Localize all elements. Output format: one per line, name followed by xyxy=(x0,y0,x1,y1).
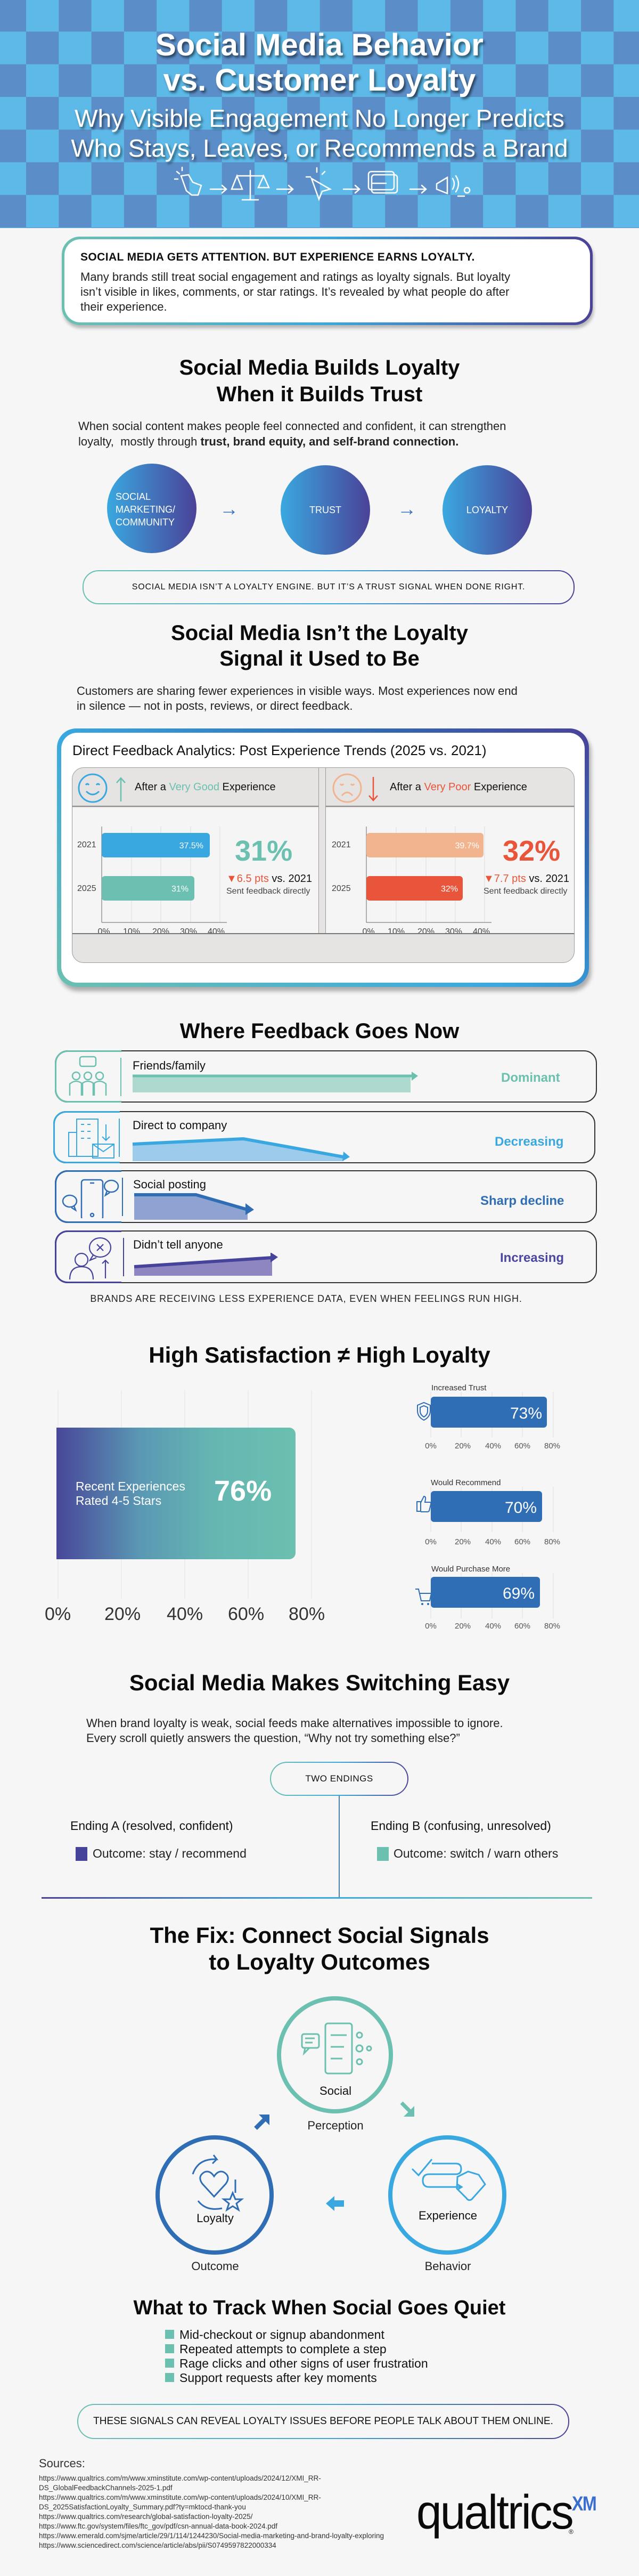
axis labels: 0% xyxy=(45,1604,71,1624)
list: signals: Mid-checkout or signup abandonment xyxy=(179,2328,384,2342)
row: direct to company: Decreasing xyxy=(495,1135,563,1149)
ending A: Ending A (resolved, confident) xyxy=(70,1819,233,1833)
circle: loyalty xyxy=(443,465,532,555)
chart: very poor: ▼7.7 pts vs. 2021 xyxy=(484,873,569,885)
heading: builds loyalty xyxy=(179,356,460,406)
arrow: to loyalty xyxy=(326,2196,344,2211)
metric: increased trust: 40% xyxy=(485,1441,501,1451)
trend: sharp decline xyxy=(134,1193,254,1220)
intro heading: SOCIAL MEDIA GETS ATTENTION. BUT EXPERIENCE EARNS LOYALTY. xyxy=(80,251,475,263)
metric: would recommend: 70% xyxy=(505,1499,537,1517)
chart: very good: Sent feedback directly xyxy=(226,887,310,896)
sources: https://www.sciencedirect.com/science/article/abs/pii/S0749597822000334 xyxy=(39,2541,276,2549)
heading: the fix: The Fix: Connect Social Signals xyxy=(150,1923,489,1948)
pill: two endings xyxy=(270,1762,408,1796)
sources: https://www.qualtrics.com/research/global-satisfaction-loyalty-2025/ xyxy=(39,2513,252,2521)
arrow: to experience xyxy=(400,2102,414,2117)
chart: very poor: 2021 xyxy=(332,840,351,849)
node: loyalty: Loyalty xyxy=(196,2212,234,2225)
stat 31%: 31% xyxy=(235,835,292,867)
title: Social Media Behavior xyxy=(155,28,484,62)
callout: signals reveal xyxy=(77,2404,569,2439)
logo: qualtrics XM: XM xyxy=(572,2493,596,2515)
circle: social marketing: SOCIAL xyxy=(116,491,151,502)
heading: not the loyalty signal xyxy=(171,621,468,670)
list: signals: Support requests after key moments xyxy=(179,2371,377,2385)
bar 76%: Rated 4-5 Stars xyxy=(76,1494,161,1508)
heading: high satisfaction: High Satisfaction ≠ High Loyalty xyxy=(149,1342,490,1367)
circle: loyalty: LOYALTY xyxy=(466,505,508,515)
list: signals: Repeated attempts to complete a step xyxy=(179,2342,387,2356)
chart: very poor: 39.7% xyxy=(455,841,479,850)
metric: increased trust: 73% xyxy=(510,1405,542,1422)
subtitle: Why Visible Engagement No Longer Predicts xyxy=(75,104,564,132)
title xyxy=(155,28,486,101)
row: didn't tell anyone: Didn’t tell anyone xyxy=(133,1238,223,1251)
icon: down arrow xyxy=(368,777,378,801)
list: signals: Rage clicks and other signs of user frustration xyxy=(179,2356,428,2370)
ending A xyxy=(70,1819,247,1861)
chart: very poor xyxy=(326,808,575,933)
metric: would purchase more: Would Purchase More xyxy=(431,1565,510,1574)
metric: increased trust: 0% xyxy=(425,1441,437,1451)
icon: sad face xyxy=(332,774,362,803)
sources: https://www.qualtrics.com/m/www.xminstitute.com/wp-content/uploads/2024/12/XMI_RR-DS_GlobalFeedbackChannels-2025-1.pdf xyxy=(39,2474,321,2492)
trend: dominant xyxy=(133,1072,418,1092)
chart: very good: 2021 xyxy=(77,840,96,849)
header very good xyxy=(72,768,318,807)
sources xyxy=(39,2457,401,2563)
chart: very good: 2025 xyxy=(77,884,96,893)
heading: builds loyalty: Social Media Builds Loyalty xyxy=(179,356,460,379)
icon: group xyxy=(69,1056,106,1096)
node: experience: Experience xyxy=(419,2209,477,2222)
row: social posting xyxy=(55,1170,597,1223)
node: experience xyxy=(388,2132,507,2275)
node: social: Perception xyxy=(307,2119,364,2132)
chart: very poor: 2025 xyxy=(332,884,351,893)
circle: trust xyxy=(281,465,370,555)
circle: trust: TRUST xyxy=(309,505,341,515)
chart: very good: 31% xyxy=(171,885,189,894)
intro box xyxy=(62,237,593,325)
cycle diagram xyxy=(155,1996,506,2273)
arrow: → xyxy=(397,498,416,520)
row: friends/family xyxy=(55,1050,597,1103)
chart: 76% satisfaction xyxy=(45,1390,325,1624)
logo: qualtrics XM: qualtrics xyxy=(416,2486,572,2539)
logo: qualtrics XM: ® xyxy=(569,2528,574,2536)
flow: social to trust to loyalty xyxy=(107,464,532,555)
paragraph: silence: in silence — not in posts, reviews, or direct feedback. xyxy=(77,699,353,712)
icon row: journey xyxy=(174,166,471,201)
metric: increased trust: 80% xyxy=(544,1441,560,1451)
paragraph: switching xyxy=(86,1716,503,1745)
paragraph: trust: When social content makes people feel connected and confident, it can strengthen xyxy=(78,419,506,433)
metric: would purchase more: 80% xyxy=(544,1622,560,1631)
metric: would purchase more: 0% xyxy=(425,1622,437,1631)
paragraph: trust xyxy=(78,419,506,448)
axis labels: 60% xyxy=(228,1604,264,1624)
metric: would recommend: Would Recommend xyxy=(431,1478,501,1487)
header very poor: After a Very Poor Experience xyxy=(390,781,527,793)
axis labels: 40% xyxy=(167,1604,203,1624)
trend: decreasing xyxy=(132,1137,350,1161)
subtitle xyxy=(71,104,570,165)
metric: would recommend xyxy=(416,1478,560,1545)
ending B: Outcome: switch / warn others xyxy=(394,1846,558,1860)
title: vs. Customer Loyalty xyxy=(163,63,476,98)
heading: not the loyalty signal: Signal it Used to Be xyxy=(219,647,420,670)
ending B xyxy=(371,1819,558,1861)
diagram: two endings xyxy=(42,1762,592,1899)
circle: social marketing: COMMUNITY xyxy=(116,517,175,528)
node: social xyxy=(277,1996,393,2132)
arrow: → xyxy=(219,498,239,520)
subtitle: Who Stays, Leaves, or Recommends a Brand xyxy=(71,134,568,162)
metric: would purchase more: 69% xyxy=(503,1585,535,1602)
row: friends/family: Friends/family xyxy=(133,1059,206,1072)
chart: loyalty metrics xyxy=(415,1383,560,1631)
intro body: Many brands still treat social engagement and ratings as loyalty signals. But loyalty xyxy=(80,270,510,283)
sub-panel: very good xyxy=(72,774,318,933)
chart: very poor: Sent feedback directly xyxy=(484,887,567,896)
divider xyxy=(318,768,326,933)
heading: not the loyalty signal: Social Media Isn’t the Loyalty xyxy=(171,621,468,645)
metric: increased trust xyxy=(417,1383,560,1451)
arrow: to social xyxy=(254,2115,269,2130)
node: loyalty: Outcome xyxy=(191,2259,239,2273)
callout: trust signal xyxy=(83,570,575,604)
panel title: Direct Feedback Analytics: Post Experience Trends (2025 vs. 2021) xyxy=(72,742,487,758)
row: social posting: Sharp decline xyxy=(480,1194,564,1208)
list: signals xyxy=(165,2328,485,2387)
paragraph: switching: Every scroll quietly answers the question, “Why not try something else?” xyxy=(86,1731,460,1745)
header banner xyxy=(0,0,639,228)
heading: what to track: What to Track When Social Goes Quiet xyxy=(134,2297,505,2319)
icon: up arrow xyxy=(116,777,126,801)
chart: very good: 37.5% xyxy=(179,841,203,850)
heading: where feedback goes: Where Feedback Goes Now xyxy=(180,1019,459,1043)
sources: Sources: xyxy=(39,2457,85,2470)
paragraph: silence xyxy=(77,684,518,712)
intro body: their experience. xyxy=(80,300,167,313)
header very good: After a Very Good Experience xyxy=(135,781,276,793)
axis labels xyxy=(45,1604,325,1624)
paragraph: silence: Customers are sharing fewer experiences in visible ways. Most experiences now end xyxy=(77,684,518,698)
row: didn't tell anyone xyxy=(55,1230,597,1283)
row: friends/family: Dominant xyxy=(501,1071,560,1085)
axis labels: 80% xyxy=(289,1604,325,1624)
logo: qualtrics XM xyxy=(416,2483,608,2553)
heading: the fix: to Loyalty Outcomes xyxy=(209,1949,430,1974)
metric: increased trust: 60% xyxy=(514,1441,530,1451)
bar 76% xyxy=(56,1428,296,1559)
stat 32%: 32% xyxy=(503,835,560,867)
sources: https://www.ftc.gov/system/files/ftc_gov/pdf/csn-annual-data-book-2024.pdf xyxy=(39,2522,277,2530)
caption: less data: BRANDS ARE RECEIVING LESS EXPERIENCE DATA, EVEN WHEN FEELINGS RUN HIGH. xyxy=(90,1293,522,1304)
node: experience: Behavior xyxy=(425,2259,471,2273)
sources: https://www.qualtrics.com/m/www.xminstitute.com/wp-content/uploads/2024/10/XMI_RR-DS_2025SatisfactionLoyalty_Summary.pdf?ty=mktocd-thank-you xyxy=(39,2493,321,2511)
inner panel xyxy=(72,767,575,963)
pill: two endings: TWO ENDINGS xyxy=(305,1773,373,1784)
sub-panel: very poor xyxy=(326,774,574,933)
bar 76%: 76% xyxy=(214,1475,272,1507)
intro body xyxy=(80,270,510,313)
callout: signals reveal: THESE SIGNALS CAN REVEAL LOYALTY ISSUES BEFORE PEOPLE TALK ABOUT THEM ONLINE. xyxy=(93,2416,553,2427)
heading: switching easy: Social Media Makes Switching Easy xyxy=(129,1670,510,1695)
trend: increasing xyxy=(134,1253,278,1276)
chart: very good: ▼6.5 pts vs. 2021 xyxy=(226,873,312,885)
sources: https://www.emerald.com/sjme/article/29/1/114/1244230/Social-media-marketing-and-brand-loyalty-exploring xyxy=(39,2532,384,2540)
bar 76%: Recent Experiences xyxy=(76,1479,185,1493)
row: didn't tell anyone: Increasing xyxy=(500,1251,564,1265)
circle: social marketing: MARKETING/ xyxy=(116,504,175,515)
heading: the fix xyxy=(150,1923,489,1974)
callout: trust signal: SOCIAL MEDIA ISN’T A LOYALTY ENGINE. BUT IT’S A TRUST SIGNAL WHEN DONE RIGHT. xyxy=(132,582,525,592)
node: social: Social xyxy=(320,2084,351,2097)
ending B: Ending B (confusing, unresolved) xyxy=(371,1819,551,1833)
intro body: isn’t visible in likes, comments, or star ratings. It’s revealed by what people do after xyxy=(80,285,509,298)
paragraph: trust: loyalty, mostly through trust, brand equity, and self-brand connection. xyxy=(78,435,458,448)
header very poor xyxy=(326,768,575,807)
row: direct to company xyxy=(53,1111,595,1163)
metric: would purchase more: 60% xyxy=(514,1622,530,1631)
metric: would purchase more xyxy=(415,1565,560,1631)
panel: direct feedback analytics xyxy=(57,728,589,987)
chart: very poor: 32% xyxy=(441,885,458,894)
icon: silent person xyxy=(69,1237,112,1279)
ending A: Outcome: stay / recommend xyxy=(93,1846,247,1860)
circle: social marketing xyxy=(107,464,196,553)
heading: builds loyalty: When it Builds Trust xyxy=(217,383,422,406)
metric: would purchase more: 20% xyxy=(455,1622,471,1631)
icon: building mail xyxy=(68,1119,114,1159)
chart: very good xyxy=(72,808,318,933)
icon: smiley xyxy=(78,774,108,803)
row: social posting: Social posting xyxy=(133,1178,206,1191)
metric: increased trust: Increased Trust xyxy=(431,1383,486,1392)
axis labels: 20% xyxy=(104,1604,141,1624)
icon: phone chat xyxy=(62,1179,119,1218)
row: direct to company: Direct to company xyxy=(133,1119,227,1132)
metric: would purchase more: 40% xyxy=(485,1622,501,1631)
metric: increased trust: 20% xyxy=(455,1441,471,1451)
paragraph: switching: When brand loyalty is weak, social feeds make alternatives impossible to ignore. xyxy=(86,1716,503,1730)
node: loyalty xyxy=(155,2135,274,2273)
